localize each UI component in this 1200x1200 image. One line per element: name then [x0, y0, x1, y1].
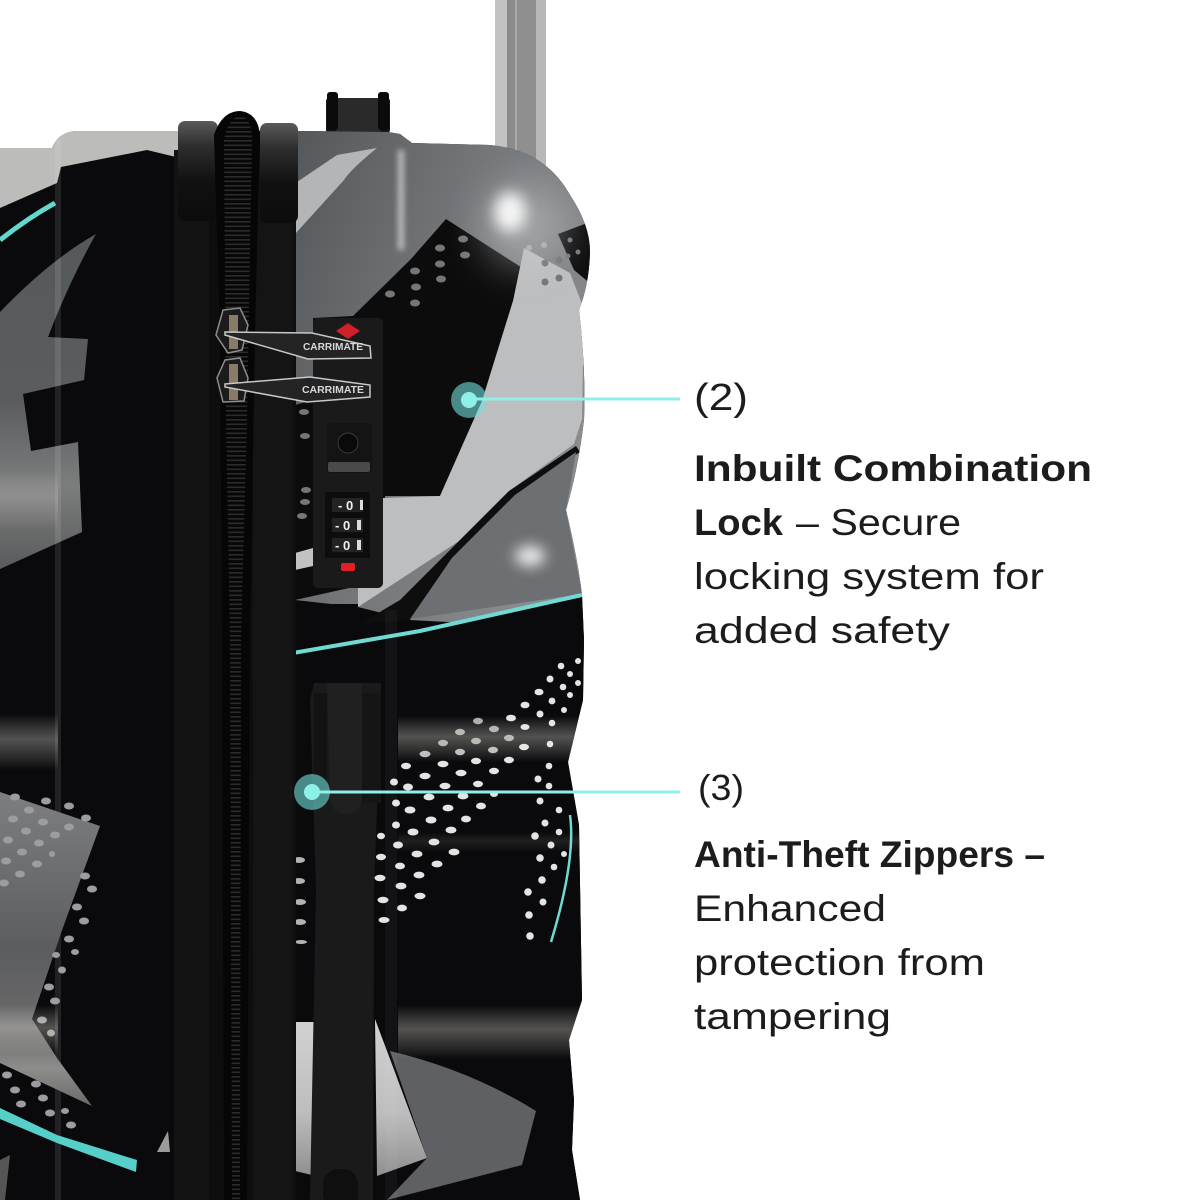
callout connector 3 — [294, 774, 680, 810]
white halftone — [374, 658, 581, 940]
left grey graphic — [0, 234, 96, 569]
lower left grey graphic — [0, 792, 100, 1106]
zipper band — [174, 111, 298, 1200]
feature text: anti-theft zippers: protection from — [694, 942, 985, 983]
glossy highlights — [385, 150, 567, 1200]
right metallic panel — [295, 130, 600, 630]
upper left teal stripe — [0, 203, 55, 240]
upper dots — [297, 236, 470, 519]
number label 3: (3) — [698, 767, 744, 808]
feature text: combination lock: locking system for — [694, 556, 1044, 597]
side carry handle — [310, 683, 381, 1200]
telescopic handle — [495, 0, 546, 170]
light grey wedge — [295, 148, 377, 234]
corner black patch — [558, 224, 590, 281]
feature text: anti-theft zippers: tampering — [694, 996, 891, 1037]
lower right light graphic — [291, 1019, 427, 1176]
corner dots — [526, 238, 580, 286]
black halftone shape — [295, 219, 524, 600]
feature text: combination lock: Inbuilt Combination — [694, 448, 1092, 489]
feature text: combination lock — [694, 448, 1092, 651]
combination wheels — [325, 492, 370, 558]
black diagonal stripe — [379, 446, 580, 620]
teal wire — [551, 815, 571, 942]
left panel vertical highlight — [55, 140, 61, 1200]
top knob — [326, 92, 390, 133]
teal stripe — [293, 595, 582, 653]
black lower field — [466, 596, 584, 1200]
lower metallic wedge — [410, 452, 582, 619]
number label 2: (2) — [694, 377, 748, 419]
feature text: combination lock: added safety — [694, 610, 951, 651]
lower left floor shape — [0, 1155, 10, 1200]
callout connector 2 — [451, 382, 680, 418]
lower right grey graphic — [387, 1051, 536, 1200]
key cover — [327, 423, 372, 473]
zipper pulls — [216, 308, 371, 402]
combination wheels: - 0 — [335, 518, 350, 533]
zipper teeth — [214, 111, 260, 1200]
lower left teal strip — [0, 1108, 137, 1172]
combination wheels: - 0 — [335, 538, 350, 553]
feature text: anti-theft zippers: Anti-Theft Zippers – — [694, 834, 1045, 875]
dots left of handle — [296, 857, 307, 944]
combination wheels: - 0 — [338, 498, 353, 513]
big light grey graphic — [358, 248, 584, 607]
feature text: anti-theft zippers — [694, 834, 1045, 1037]
red button — [341, 563, 355, 571]
feature text: combination lock: – Secure — [796, 502, 961, 543]
red TSA diamond — [336, 323, 360, 339]
lower left dots — [0, 794, 97, 1128]
zipper pulls: CARRIMATE — [302, 385, 364, 396]
feature text: combination lock: Lock — [694, 502, 783, 543]
small triangle — [157, 1131, 170, 1152]
zipper pulls: CARRIMATE — [303, 342, 363, 353]
suitcase body — [0, 120, 600, 1200]
feature text: anti-theft zippers: Enhanced — [694, 888, 886, 929]
top left light panel — [0, 131, 178, 208]
lock panel — [313, 318, 383, 588]
small light wedge by lock — [295, 548, 313, 570]
reflection bands — [0, 470, 588, 1059]
